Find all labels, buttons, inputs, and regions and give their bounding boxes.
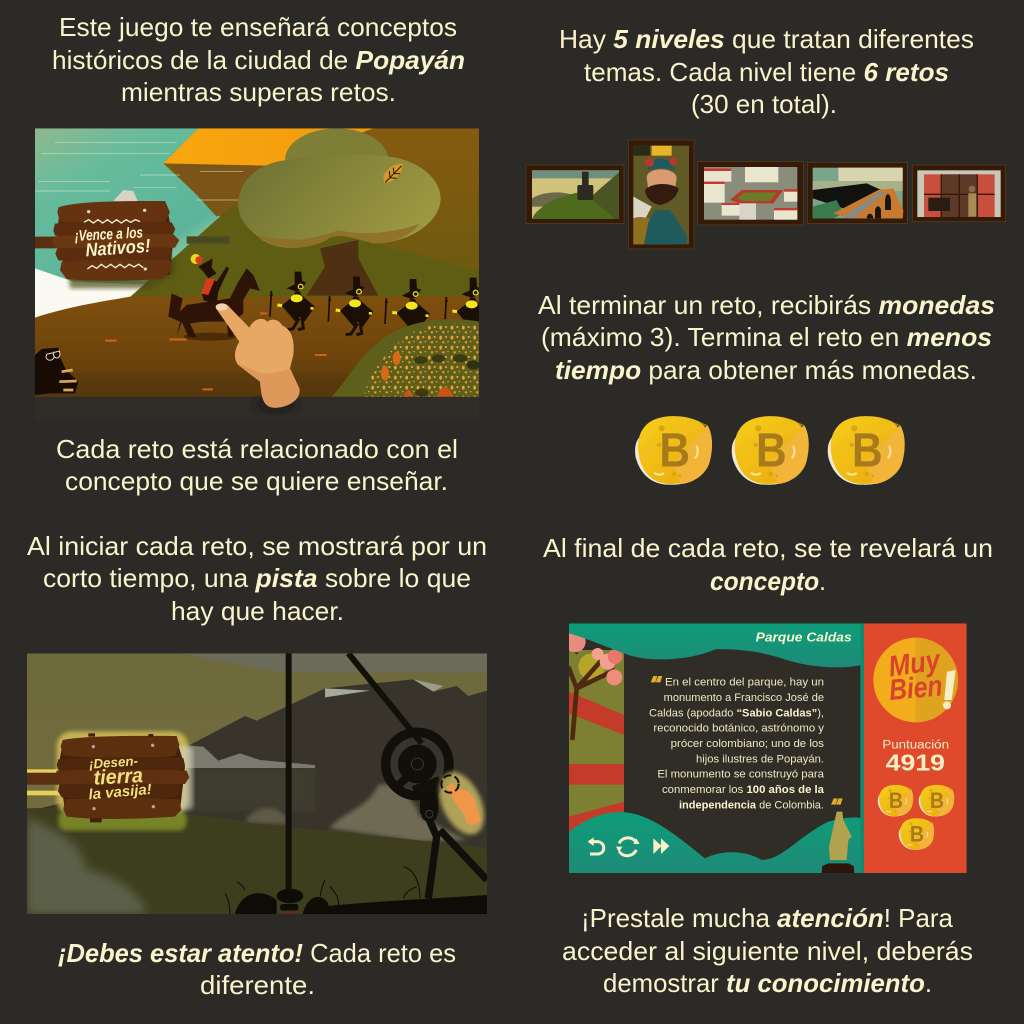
text: challenge caption: concepto que se quiere enseñar. xyxy=(65,466,448,496)
wheel mechanism xyxy=(386,732,487,898)
score panel xyxy=(860,623,967,873)
fog over lake xyxy=(183,767,315,811)
level 4: bridge xyxy=(807,162,907,223)
rope xyxy=(286,653,292,893)
top wave xyxy=(569,623,862,667)
clouds xyxy=(35,142,243,200)
text: intro xyxy=(52,12,465,107)
mountains xyxy=(40,679,487,850)
coin 1 xyxy=(635,416,712,485)
score panel: B xyxy=(930,788,944,813)
text: concept reveal: Al final de cada reto, se te revelará un xyxy=(543,533,993,563)
wooden sign: ¡Vence a los xyxy=(74,224,143,245)
bush xyxy=(332,319,479,397)
icon: hint hand xyxy=(436,769,487,838)
text: pay attention: ¡Prestale mucha atención! Para xyxy=(581,903,954,933)
score panel: 4919 xyxy=(886,749,945,775)
quote text: conmemorar los 100 años de la xyxy=(662,784,824,796)
coin 2: B xyxy=(756,423,787,477)
text: challenge caption xyxy=(56,434,458,496)
panel: concept screen xyxy=(564,623,967,873)
text: be attentive: diferente. xyxy=(200,970,315,1000)
level 1: monument on a hill xyxy=(526,165,624,223)
quote text xyxy=(649,676,843,811)
foreground silhouettes xyxy=(225,867,487,914)
coin 3 xyxy=(828,416,905,485)
text: intro: mientras superas retos. xyxy=(121,77,396,107)
text: challenge caption: Cada reto está relacionado con el xyxy=(56,434,458,464)
score panel: Puntuación xyxy=(882,737,949,751)
ground xyxy=(35,297,479,397)
quote text: prócer colombiano; uno de los xyxy=(671,738,824,750)
text: concept reveal xyxy=(543,533,993,596)
wooden hint sign: la vasija! xyxy=(88,782,153,803)
text: levels: temas. Cada nivel tiene 6 retos xyxy=(584,57,949,87)
text: hint explanation xyxy=(27,531,487,626)
text: concept reveal: concepto. xyxy=(710,566,826,596)
quote text: independencia de Colombia. xyxy=(679,799,824,811)
text: be attentive xyxy=(58,938,456,1000)
horse and rider xyxy=(168,254,260,341)
wooden hint sign: tierra xyxy=(93,764,144,790)
wooden sign xyxy=(35,190,179,288)
panel: game screenshot with the hint sign xyxy=(27,653,493,914)
quote text: En el centro del parque, hay un xyxy=(665,677,824,689)
score panel: B xyxy=(889,788,903,813)
text: pay attention: acceder al siguiente nivel, deberás xyxy=(562,936,973,966)
wooden sign: Nativos! xyxy=(85,235,151,260)
icon: pointing hand xyxy=(216,303,300,414)
wooden hint sign xyxy=(27,731,193,831)
text: intro: históricos de la ciudad de Popayán xyxy=(52,45,465,75)
text: coins: Al terminar un reto, recibirás monedas xyxy=(538,290,995,320)
quote text: hijos ilustres de Popayán. xyxy=(696,753,824,765)
text: coins: (máximo 3). Termina el reto en menos xyxy=(541,322,992,352)
coins row xyxy=(635,416,905,485)
bottom hills xyxy=(569,812,862,873)
level 5: office window xyxy=(912,165,1006,222)
text: be attentive: ¡Debes estar atento! Cada reto es xyxy=(58,938,456,968)
quote text: monumento a Francisco José de xyxy=(664,692,824,704)
text: pay attention: demostrar tu conocimiento. xyxy=(603,968,932,998)
text: intro: Este juego te enseñará conceptos xyxy=(59,12,457,42)
score panel: B xyxy=(910,821,924,846)
garden illustration xyxy=(564,631,624,833)
statue xyxy=(822,812,854,873)
spectacled bear xyxy=(35,348,78,395)
score panel: Bien xyxy=(888,669,944,707)
icons: back, replay, forward xyxy=(588,837,669,856)
text: levels xyxy=(559,24,974,119)
text: coins: tiempo para obtener más monedas. xyxy=(555,355,977,385)
quote text: El monumento se construyó para xyxy=(657,769,824,781)
panel: game screenshot with the natives challenge xyxy=(35,128,490,421)
coin 3: B xyxy=(852,423,883,477)
text: pay attention xyxy=(562,903,973,998)
text: coins xyxy=(538,290,995,385)
score panel: Muy xyxy=(886,644,944,684)
text: hint explanation: hay que hacer. xyxy=(171,596,344,626)
text: hint explanation: corto tiempo, una pista sobre lo que xyxy=(43,563,471,593)
wooden hint sign: ¡Desen- xyxy=(88,753,139,772)
coin 2 xyxy=(732,416,809,485)
quote text: Caldas (apodado “Sabio Caldas”), xyxy=(649,707,824,719)
tree xyxy=(238,128,441,296)
level 3: park from above xyxy=(697,162,803,225)
grass tufts xyxy=(105,312,327,390)
title: Parque Caldas xyxy=(756,630,852,645)
coin 1: B xyxy=(659,423,690,477)
level 2: general portrait xyxy=(628,140,694,249)
natives xyxy=(270,272,315,330)
quote text: reconocido botánico, astrónomo y xyxy=(653,723,825,735)
text: hint explanation: Al iniciar cada reto, se mostrará por un xyxy=(27,531,487,561)
green hill xyxy=(27,808,487,914)
text: levels: Hay 5 niveles que tratan diferentes xyxy=(559,24,974,54)
text: levels: (30 en total). xyxy=(691,89,837,119)
level thumbnails xyxy=(526,140,1006,249)
